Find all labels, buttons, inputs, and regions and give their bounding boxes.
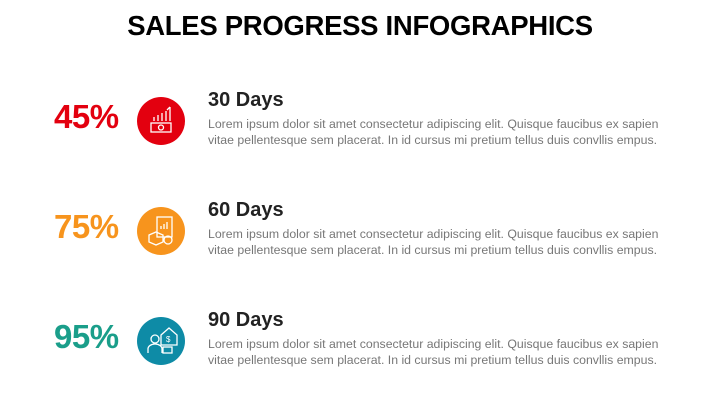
title: SALES PROGRESS INFOGRAPHICS: [127, 10, 593, 41]
percentage 95%: 95%: [54, 318, 119, 355]
text block: [208, 337, 658, 367]
text block: vitae pellentesque sem placerat. In id cursus mi pretium tellus duis convllis empus.: [208, 243, 657, 257]
heading: 30 Days: [208, 89, 284, 111]
row: 60 days: [54, 199, 658, 257]
text block: vitae pellentesque sem placerat. In id cursus mi pretium tellus duis convllis empus.: [208, 353, 657, 367]
text block: vitae pellentesque sem placerat. In id cursus mi pretium tellus duis convllis empus.: [208, 133, 657, 147]
percentage 45%: 45%: [54, 98, 119, 135]
text block: Lorem ipsum dolor sit amet consectetur adipiscing elit. Quisque faucibus ex sapien: [208, 117, 658, 131]
icon: agent house: [137, 317, 185, 365]
text block: Lorem ipsum dolor sit amet consectetur adipiscing elit. Quisque faucibus ex sapien: [208, 227, 658, 241]
icon: agent house: $: [166, 335, 171, 344]
text block: Lorem ipsum dolor sit amet consectetur adipiscing elit. Quisque faucibus ex sapien: [208, 337, 658, 351]
row: 30 days: [54, 89, 658, 147]
text block: [208, 117, 658, 147]
icon: box report: [137, 207, 185, 255]
icon: money growth: [137, 97, 185, 145]
percentage 75%: 75%: [54, 208, 119, 245]
heading: 90 Days: [208, 309, 284, 331]
heading: 60 Days: [208, 199, 284, 221]
text block: [208, 227, 658, 257]
row: 90 days: [54, 309, 658, 367]
